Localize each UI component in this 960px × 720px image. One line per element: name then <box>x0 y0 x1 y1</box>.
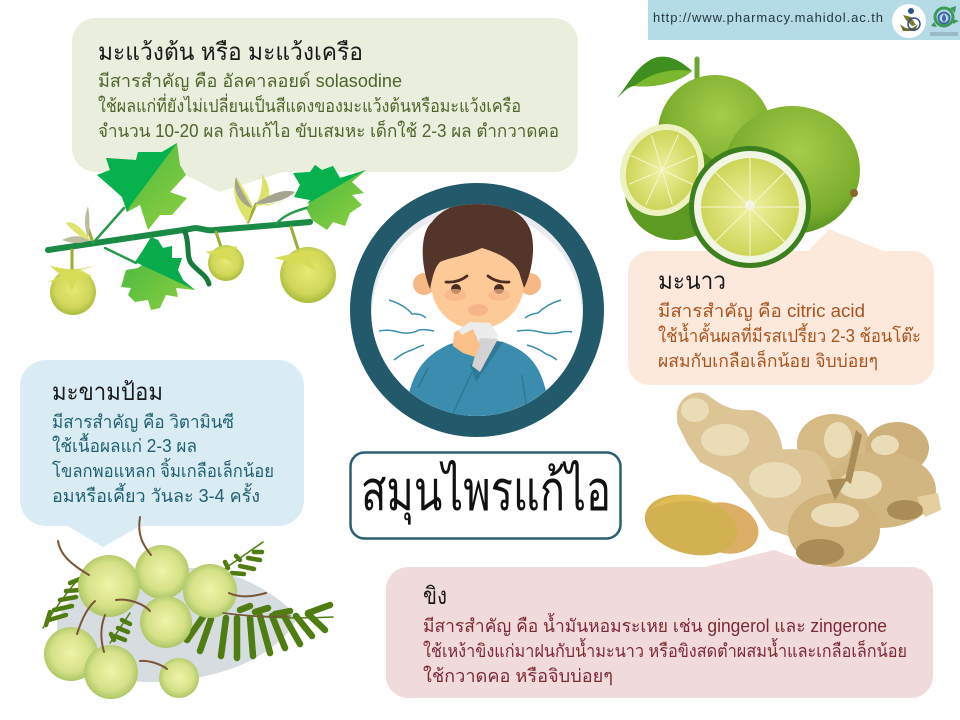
illustration: bitter melon vine <box>48 143 366 315</box>
left lime slice <box>605 110 719 230</box>
front lime slice <box>689 146 811 268</box>
ginger lobes <box>677 393 941 567</box>
body text: ใช้น้ำคั้นผลที่มีรสเปรี้ยว 2-3 ช้อนโต๊ะ <box>658 323 921 346</box>
lime leaf and stem <box>617 57 697 98</box>
ginger shading <box>796 430 923 565</box>
body text <box>52 412 274 506</box>
body text: ใช้เหง้าขิงแก่มาฝนกับน้ำมะนาว หรือขิงสดตำผสมน้ำและเกลือเล็กน้อย <box>423 638 907 661</box>
body text: อมหรือเคี้ยว วันละ 3-4 ครั้ง <box>52 483 260 506</box>
amla fruits <box>44 545 237 699</box>
body text <box>658 301 921 371</box>
vine stems <box>48 204 310 284</box>
body text: มีสารสำคัญ คือ วิตามินซี <box>52 412 234 432</box>
icon: herbal logo <box>930 6 959 36</box>
ears <box>413 273 432 295</box>
heading: ขิง <box>423 583 447 610</box>
panel: lime speech bubble <box>628 229 934 385</box>
body text: มีสารสำคัญ คือ citric acid <box>658 301 865 321</box>
body text: ใช้ผลแก่ที่ยังไม่เปลี่ยนเป็นสีแดงของมะแว้งต้นหรือมะแว้งเครือ <box>98 93 521 116</box>
panel: bitter melon speech bubble <box>72 18 578 192</box>
face <box>431 248 524 327</box>
top right leaf <box>293 165 366 230</box>
body text: มีสารสำคัญ คือ น้ำมันหอมระเหย เช่น gingerol และ zingerone <box>423 613 887 636</box>
lime stem end <box>850 189 858 197</box>
man <box>372 202 582 421</box>
body text: จำนวน 10-20 ผล กินแก้ไอ ขับเสมหะ เด็กใช้ 2-3 ผล ตำกวาดคอ <box>98 119 559 141</box>
heading: มะนาว <box>658 268 726 295</box>
ring <box>360 194 594 426</box>
panel: amla speech bubble <box>20 360 304 547</box>
fruit: small melon centre <box>205 245 244 281</box>
body text: ใช้เนื้อผลแก่ 2-3 ผล <box>52 433 197 456</box>
right big lime <box>724 106 860 234</box>
cough lines <box>379 300 572 360</box>
fruit: small melon left <box>48 266 96 315</box>
illustration: ginger root <box>638 393 941 567</box>
illustration: amla fruits and leaves <box>43 517 333 699</box>
central illustration: coughing man in a ring <box>360 194 594 426</box>
eyes and brows <box>451 284 461 294</box>
body text <box>98 71 559 141</box>
ginger slice <box>638 485 764 565</box>
hair <box>423 202 533 289</box>
fern leaves <box>43 542 333 658</box>
body text: ผสมกับเกลือเล็กน้อย จิบบ่อยๆ <box>658 349 878 371</box>
title: สมุนไพรแก้ไอ <box>361 459 611 525</box>
illustration: limes <box>605 57 860 268</box>
body <box>409 337 547 420</box>
amla stems <box>58 517 290 669</box>
top left leaf <box>97 143 187 230</box>
website url: http://www.pharmacy.mahidol.ac.th <box>653 10 883 25</box>
panel: ginger speech bubble <box>386 550 933 698</box>
tissue <box>458 322 498 342</box>
header bar: website and logos <box>648 0 960 40</box>
lower leaf <box>121 237 195 310</box>
body text <box>423 613 907 686</box>
nose <box>468 304 488 316</box>
back lime <box>658 75 772 191</box>
icon: faculty logo <box>892 4 926 38</box>
flower buds <box>62 174 295 243</box>
fruit: large melon right <box>274 247 336 303</box>
body text: ใช้กวาดคอ หรือจิบบ่อยๆ <box>423 665 613 686</box>
heading: มะแว้งต้น หรือ มะแว้งเครือ <box>98 39 363 66</box>
lower left lime body <box>625 144 725 240</box>
body text: โขลกพอแหลก จิ้มเกลือเล็กน้อย <box>52 458 274 481</box>
hand <box>453 329 480 357</box>
body text: มีสารสำคัญ คือ อัลคาลอยด์ solasodine <box>98 71 402 91</box>
ginger highlights <box>681 398 899 527</box>
title box <box>350 452 620 538</box>
plate shadow <box>57 568 297 682</box>
heading: มะขามป้อม <box>52 379 163 406</box>
